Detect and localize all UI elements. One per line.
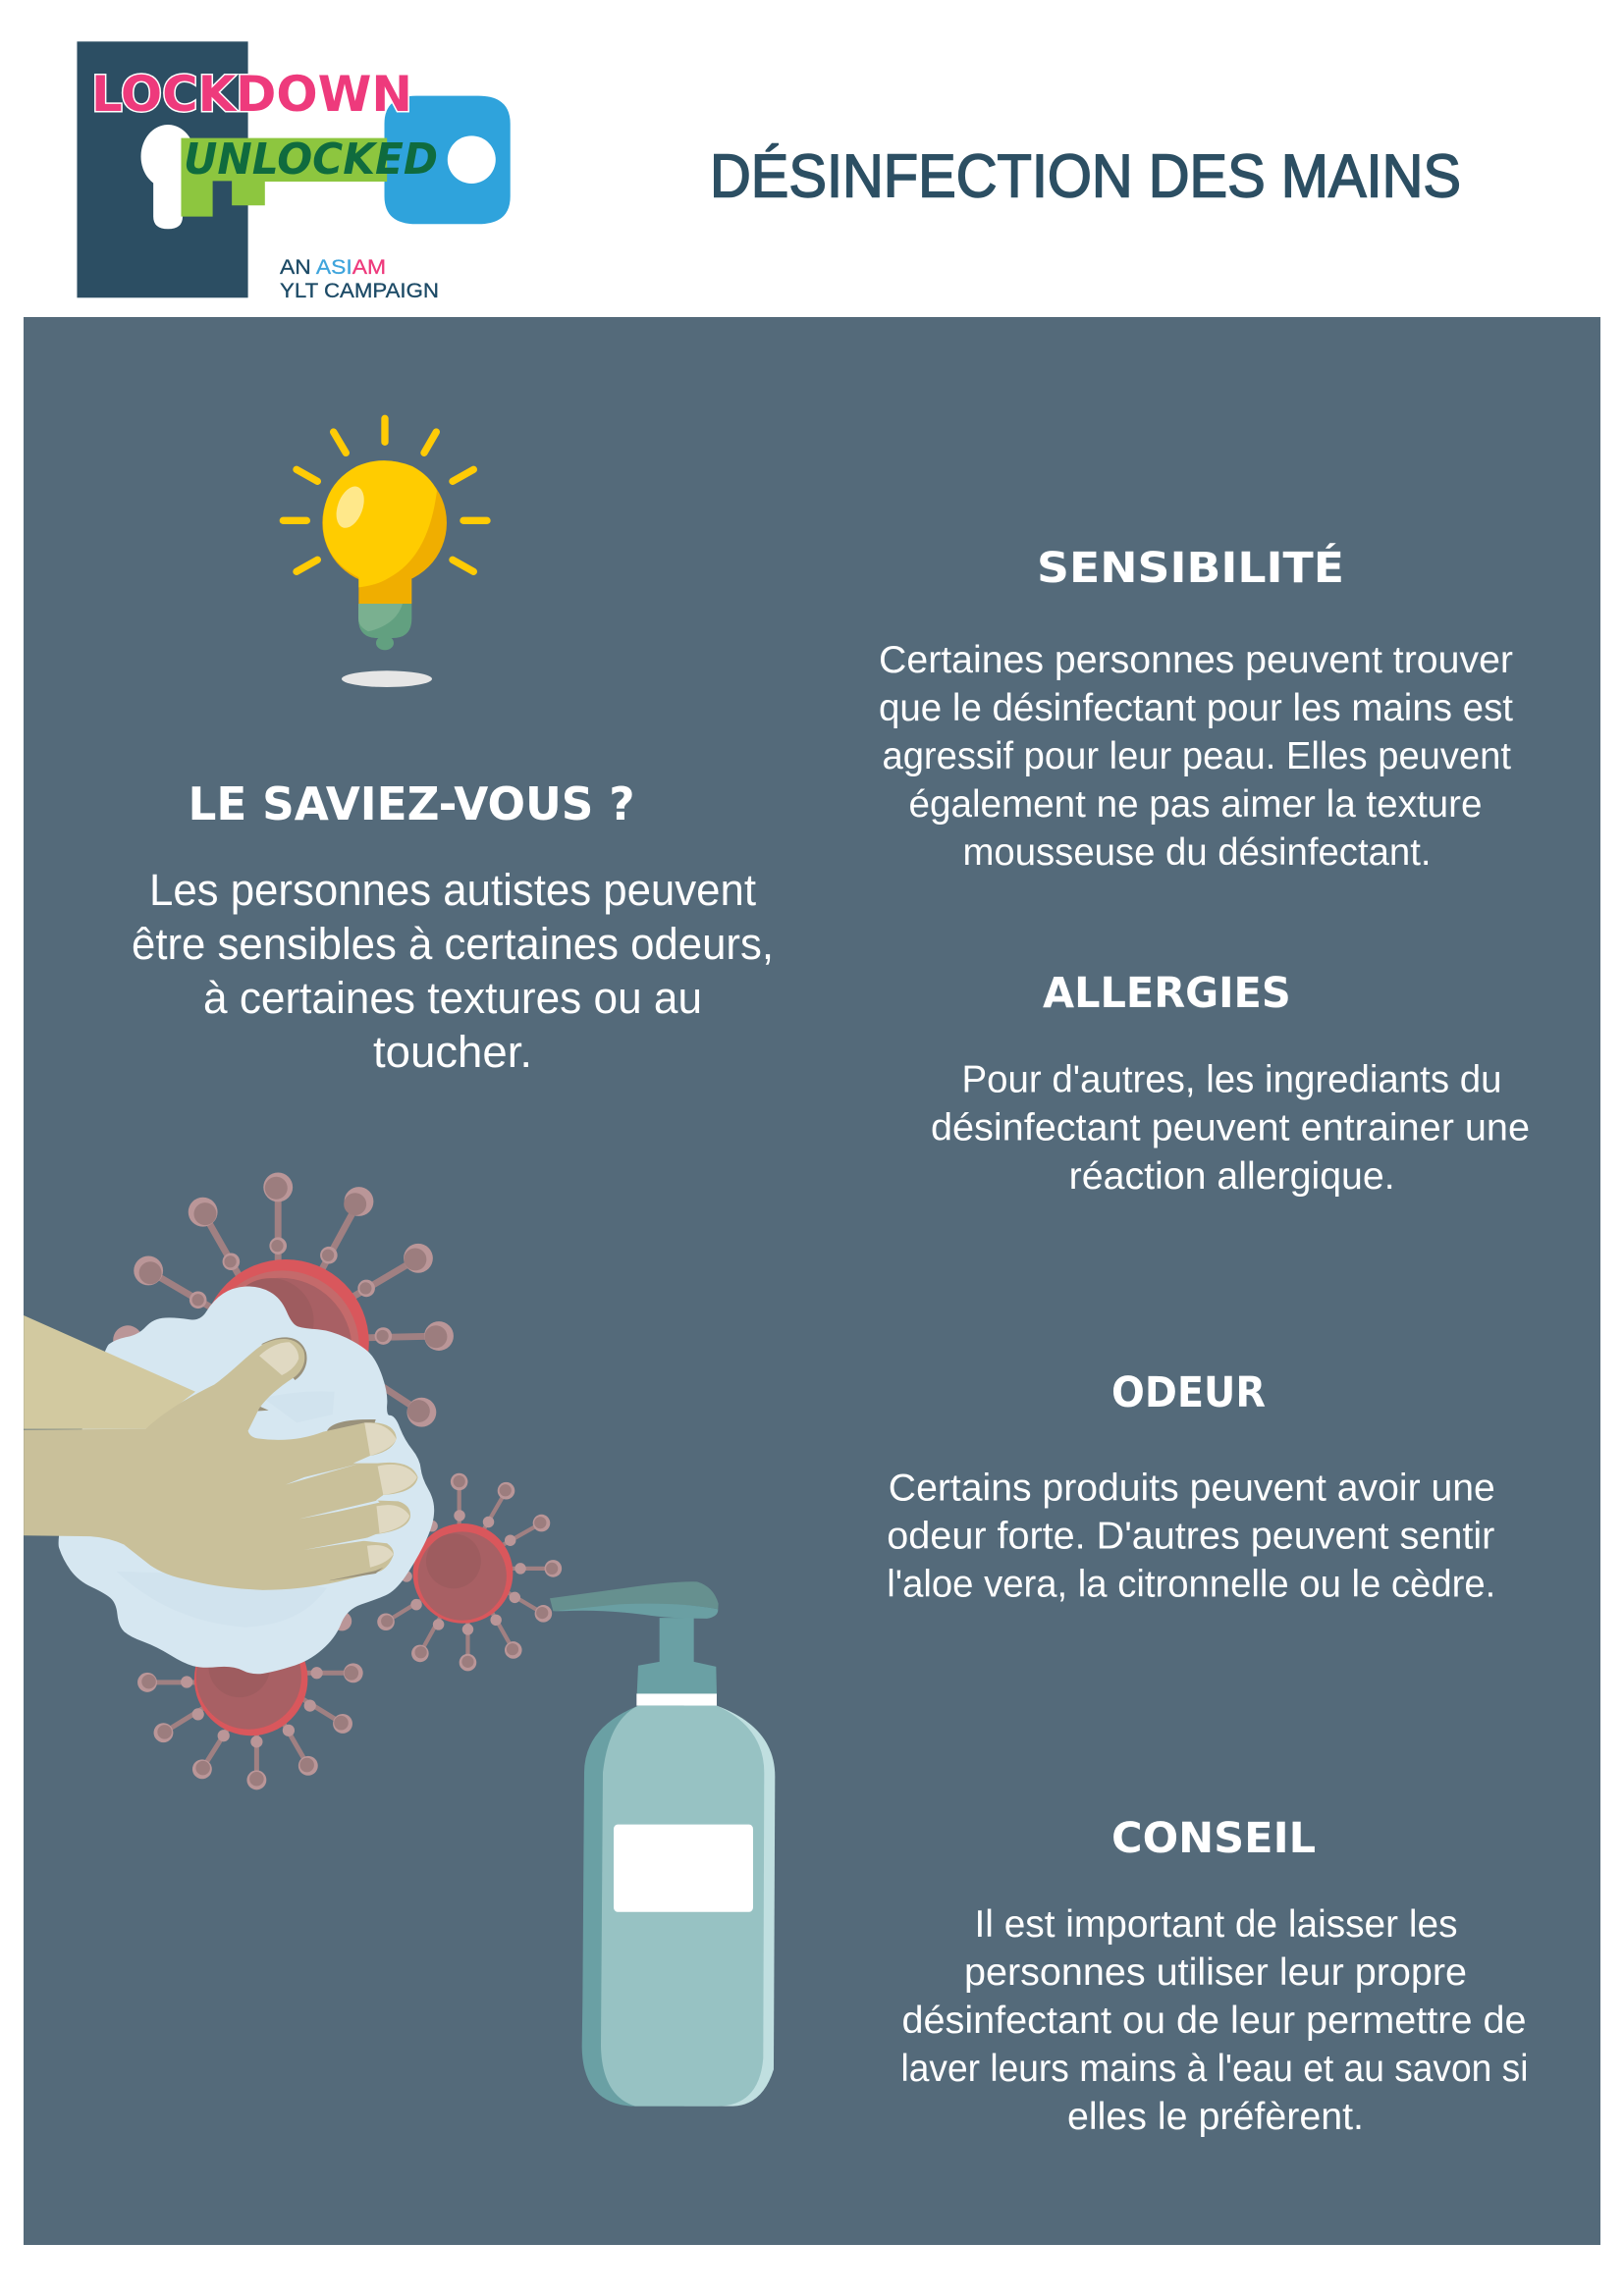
- text block: Conseil: personnes utiliser leur propre: [964, 1951, 1467, 1994]
- text block: Conseil: laver leurs mains à l'eau et au savon si: [901, 2048, 1528, 2090]
- icon: large virus: [128, 1187, 439, 1426]
- text block: Le saviez-vous: [132, 865, 774, 1077]
- bottle label: [614, 1825, 753, 1912]
- icon: soap dispenser bottle: [550, 1581, 775, 2107]
- text block: Le saviez-vous: Les personnes autistes peuvent: [149, 865, 756, 915]
- bottle neck and cap: [637, 1618, 717, 1694]
- illustration: hands washing with foam and viruses: [24, 1187, 553, 1780]
- text block: Le saviez-vous: à certaines textures ou au: [203, 973, 702, 1023]
- text block: Sensibilité: mousseuse du désinfectant.: [962, 831, 1432, 874]
- text block: Sensibilité: également ne pas aimer la texture: [909, 783, 1483, 826]
- logo: Lockdown Unlocked: [77, 41, 511, 302]
- logo: Lockdown Unlocked: LOCKDOWN: [91, 66, 412, 123]
- logo: Lockdown Unlocked: UNLOCKED: [184, 134, 438, 185]
- thumb nail: [259, 1342, 298, 1375]
- text block: Odeur: [887, 1467, 1495, 1606]
- logo: Lockdown Unlocked: AN ASIAM: [280, 256, 386, 279]
- title: DÉSINFECTION DES MAINS: [710, 143, 1461, 210]
- heading: Le saviez-vous: LE SAVIEZ-VOUS ?: [189, 777, 634, 830]
- text block: Allergies: Pour d'autres, les ingrediants du: [962, 1058, 1502, 1101]
- bottle body: [582, 1706, 775, 2107]
- text block: Allergies: [931, 1058, 1530, 1198]
- finger nails: [364, 1422, 417, 1568]
- heading: Odeur: ODEUR: [1111, 1368, 1266, 1417]
- text block: Odeur: l'aloe vera, la citronnelle ou le cèdre.: [887, 1563, 1495, 1606]
- text block: Allergies: réaction allergique.: [1069, 1155, 1395, 1198]
- upper arm: [24, 1315, 195, 1429]
- text block: Sensibilité: agressif pour leur peau. Elles peuvent: [882, 735, 1511, 777]
- text block: Conseil: [901, 1903, 1528, 2138]
- text block: Allergies: désinfectant peuvent entrainer une: [931, 1107, 1530, 1148]
- text block: Sensibilité: que le désinfectant pour les mains est: [879, 687, 1513, 729]
- text block: Sensibilité: Certaines personnes peuvent trouver: [879, 639, 1513, 681]
- foam: [60, 1288, 433, 1673]
- text block: Sensibilité: [879, 639, 1513, 874]
- foam and hands: [24, 1288, 433, 1673]
- text block: Le saviez-vous: être sensibles à certaines odeurs,: [132, 919, 774, 969]
- text block: Conseil: désinfectant ou de leur permettre de: [901, 2000, 1526, 2042]
- hand with fingers: [24, 1337, 418, 1590]
- text block: Conseil: elles le préfèrent.: [1067, 2096, 1364, 2138]
- heading: Allergies: ALLERGIES: [1043, 969, 1291, 1018]
- text block: Conseil: Il est important de laisser les: [974, 1903, 1457, 1946]
- bottle collar: [636, 1693, 717, 1706]
- text block: Odeur: odeur forte. D'autres peuvent sentir: [887, 1516, 1494, 1557]
- heading: Sensibilité: SENSIBILITÉ: [1037, 543, 1344, 593]
- text block: Odeur: Certains produits peuvent avoir une: [889, 1467, 1495, 1510]
- logo: Lockdown Unlocked: YLT CAMPAIGN: [280, 280, 439, 302]
- icon: bottom virus: [147, 1621, 353, 1780]
- bottle pump nozzle: [550, 1581, 719, 1619]
- text block: Le saviez-vous: toucher.: [373, 1027, 532, 1077]
- icon: right virus: [386, 1481, 553, 1663]
- icon: light bulb: [283, 418, 487, 687]
- heading: Conseil: CONSEIL: [1111, 1814, 1316, 1863]
